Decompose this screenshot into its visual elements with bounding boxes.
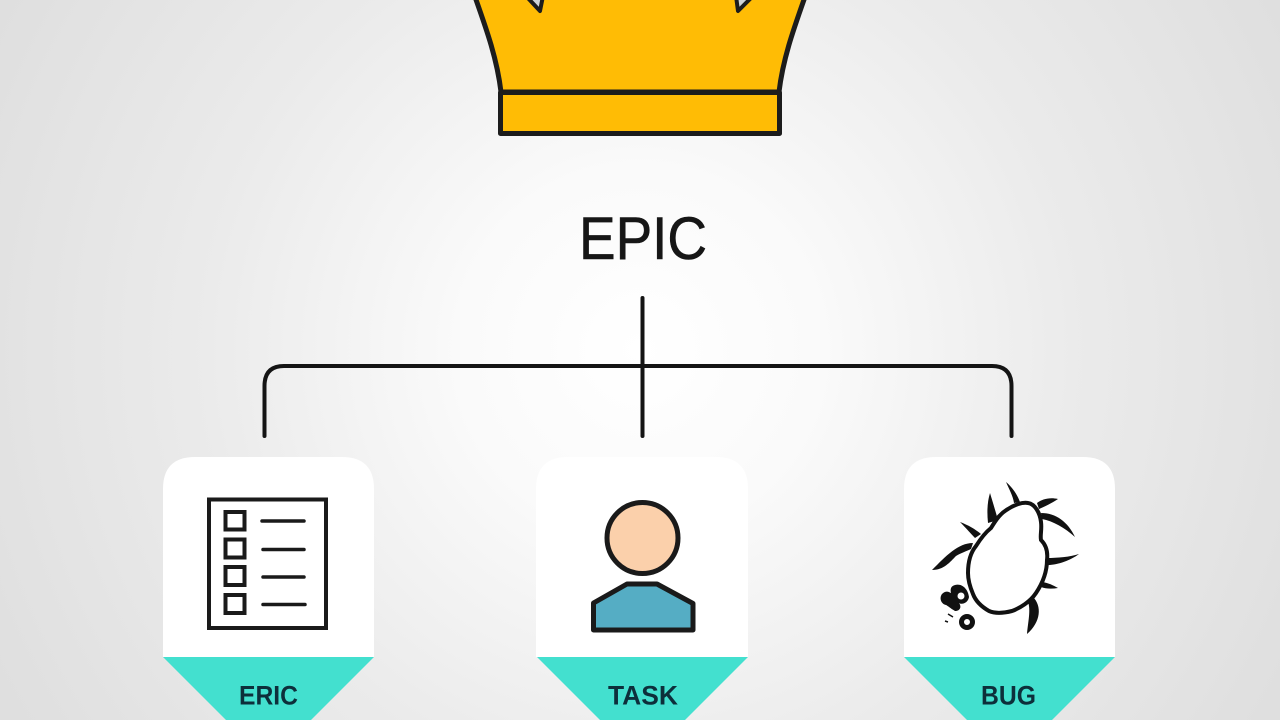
icon: bug [932, 482, 1079, 634]
label: TASK: TASK [608, 680, 678, 710]
label: BUG: BUG [981, 680, 1036, 710]
icon: checklist [209, 500, 326, 628]
card banner: TASK [537, 657, 748, 720]
card: TASK [536, 457, 748, 720]
title: EPIC: EPIC [579, 205, 707, 272]
card: ERIC [163, 457, 374, 720]
tree connector [264, 298, 1012, 436]
label: ERIC: ERIC [239, 680, 298, 710]
card: BUG [904, 457, 1115, 720]
card banner: BUG [904, 657, 1115, 720]
bug droppings [941, 585, 972, 628]
icon: person [594, 502, 693, 630]
icon: crown [474, 0, 806, 134]
card banner: ERIC [163, 657, 374, 720]
